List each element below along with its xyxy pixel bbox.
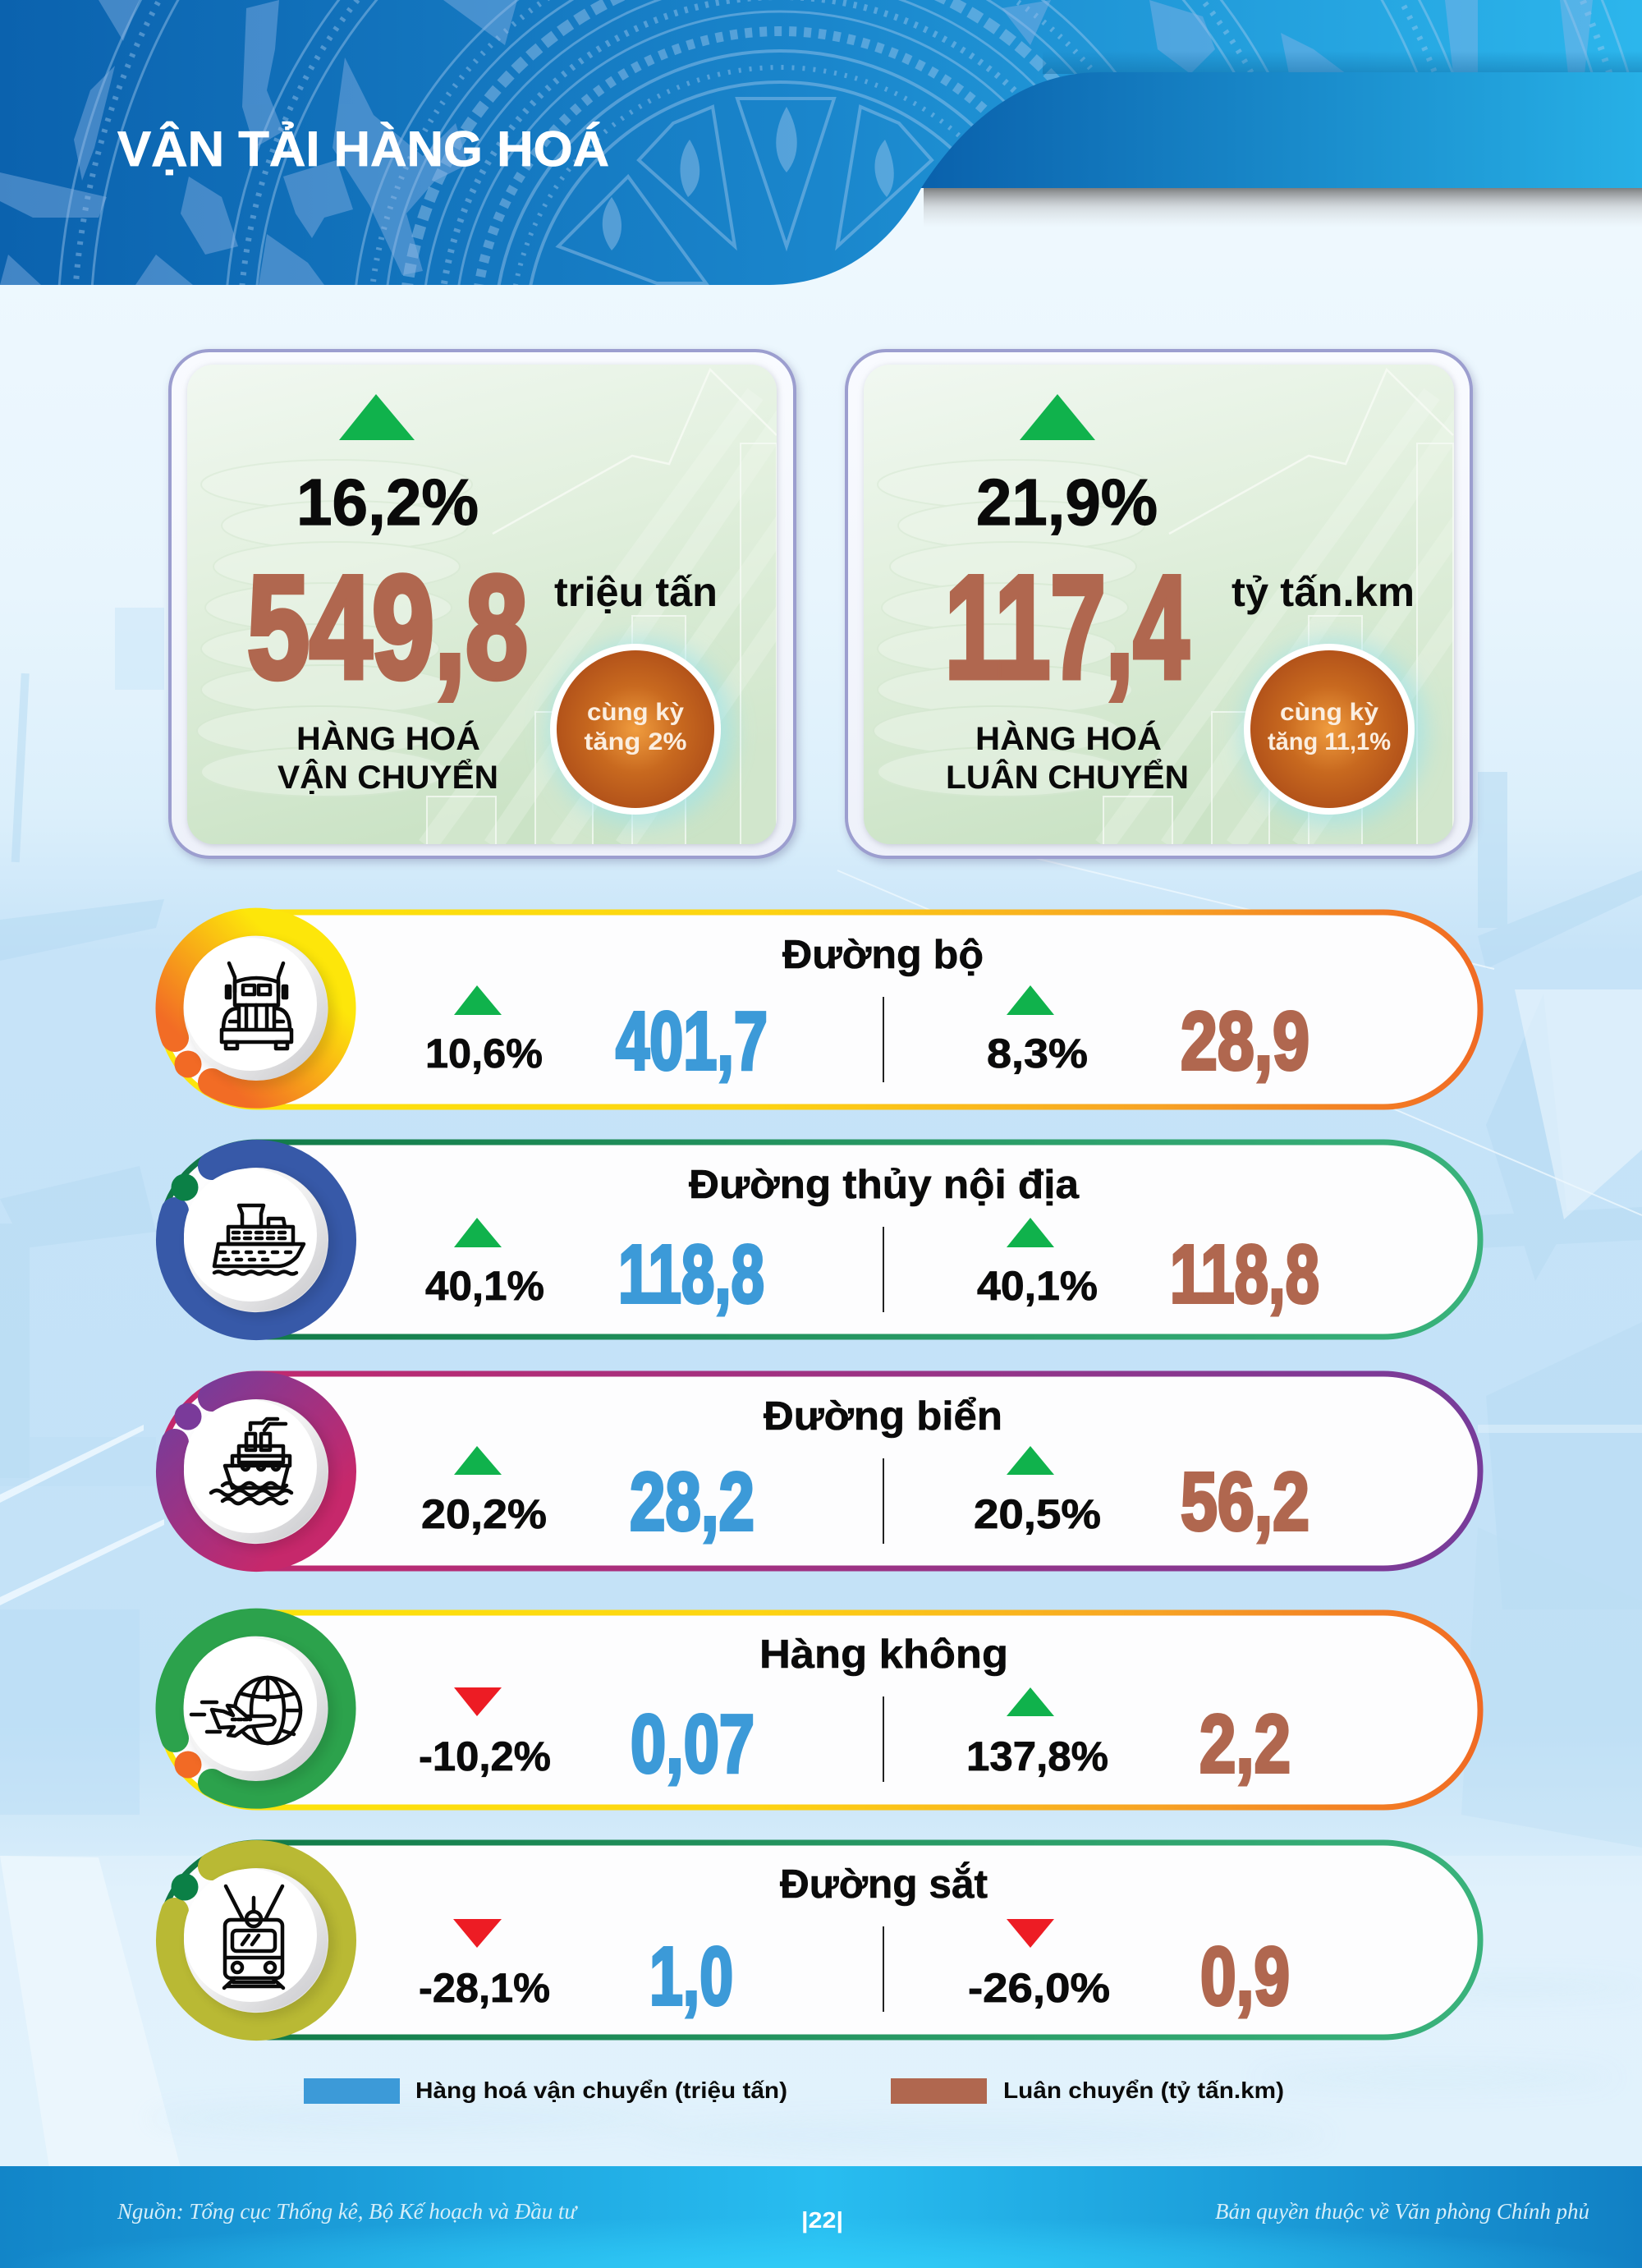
row: đường biển: 20,5% bbox=[974, 1491, 1101, 1537]
row: đường thủy nội địa: Đường thủy nội địa bbox=[689, 1163, 1080, 1207]
row: đường sắt: 1,0 bbox=[649, 1931, 733, 2022]
panel: hàng hoá vận chuyển: 549,8 bbox=[247, 545, 528, 709]
row: đường sắt: 0,9 bbox=[1200, 1931, 1290, 2022]
row: đường sắt: Đường sắt bbox=[780, 1862, 988, 1907]
row: đường thủy nội địa: 40,1% bbox=[425, 1263, 544, 1309]
badge: cùng kỳ tăng 2%: tăng 2% bbox=[585, 728, 686, 755]
panel: hàng hoá vận chuyển: 16,2% bbox=[296, 466, 479, 539]
row: đường thủy nội địa: 40,1% bbox=[977, 1263, 1098, 1309]
header banner with bronze-drum pattern bbox=[0, 0, 1642, 285]
legend bbox=[304, 2077, 1284, 2104]
footer bbox=[0, 2166, 1642, 2268]
badge: cùng kỳ tăng 11,1%: cùng kỳ bbox=[1280, 699, 1378, 726]
row: hàng không: -10,2% bbox=[419, 1733, 551, 1779]
row: đường bộ bbox=[160, 912, 1480, 1107]
footer: |22| bbox=[801, 2207, 843, 2233]
row: đường biển bbox=[160, 1374, 1480, 1568]
row: đường bộ: 401,7 bbox=[616, 995, 768, 1087]
legend: Hàng hoá vận chuyển (triệu tấn) bbox=[415, 2077, 787, 2103]
row: đường biển: 20,2% bbox=[421, 1491, 547, 1537]
row: đường thủy nội địa: 118,8 bbox=[1170, 1228, 1319, 1320]
row: đường sắt: -28,1% bbox=[419, 1965, 550, 2011]
panel: hàng hoá vận chuyển: triệu tấn bbox=[554, 569, 718, 615]
row: đường sắt bbox=[160, 1843, 1480, 2037]
icon: ship in ring bbox=[170, 1385, 342, 1558]
row: đường thủy nội địa bbox=[160, 1142, 1480, 1337]
row: đường biển: Đường biển bbox=[764, 1394, 1002, 1439]
icon: ferry in ring bbox=[170, 1154, 342, 1326]
panel: hàng hoá luân chuyển: tỷ tấn.km bbox=[1232, 569, 1415, 615]
panel: hàng hoá vận chuyển: VẬN CHUYỂN bbox=[277, 757, 498, 796]
panel: hàng hoá luân chuyển: 117,4 bbox=[945, 545, 1189, 709]
row: đường bộ: 10,6% bbox=[425, 1031, 543, 1077]
row: hàng không: 2,2 bbox=[1199, 1698, 1291, 1790]
icon: train in ring bbox=[170, 1854, 342, 2027]
icon: plane and globe in ring bbox=[170, 1623, 342, 1795]
badge: cùng kỳ tăng 11,1% bbox=[1242, 640, 1426, 824]
row: đường biển: 28,2 bbox=[630, 1456, 754, 1548]
row: hàng không: 137,8% bbox=[966, 1733, 1108, 1779]
row: đường bộ: Đường bộ bbox=[782, 933, 984, 977]
icon: truck in ring bbox=[170, 922, 342, 1095]
row: hàng không: 0,07 bbox=[631, 1698, 754, 1790]
footer: Nguồn: Tổng cục Thống kê, Bộ Kế hoạch và Đầu tư bbox=[117, 2199, 578, 2224]
badge: cùng kỳ tăng 2% bbox=[548, 640, 732, 824]
badge: cùng kỳ tăng 2%: cùng kỳ bbox=[587, 699, 684, 726]
row: hàng không: Hàng không bbox=[759, 1632, 1008, 1677]
row: đường bộ: 28,9 bbox=[1181, 995, 1309, 1087]
panel: hàng hoá luân chuyển: HÀNG HOÁ bbox=[975, 720, 1162, 757]
header right band bbox=[921, 72, 1642, 188]
legend: Luân chuyển (tỷ tấn.km) bbox=[1003, 2077, 1284, 2103]
shadow under blue band bbox=[924, 188, 1642, 227]
row: đường sắt: -26,0% bbox=[968, 1965, 1110, 2011]
row: hàng không bbox=[160, 1613, 1480, 1807]
panel: hàng hoá luân chuyển bbox=[846, 351, 1498, 857]
row: đường bộ: 8,3% bbox=[987, 1031, 1088, 1077]
row: đường biển: 56,2 bbox=[1181, 1456, 1309, 1548]
panel: hàng hoá luân chuyển: LUÂN CHUYỂN bbox=[946, 757, 1189, 796]
badge: cùng kỳ tăng 11,1%: tăng 11,1% bbox=[1268, 728, 1391, 755]
panel: hàng hoá vận chuyển bbox=[170, 351, 821, 857]
panel: hàng hoá vận chuyển: HÀNG HOÁ bbox=[296, 720, 480, 757]
title: VẬN TẢI HÀNG HOÁ bbox=[117, 122, 609, 177]
footer: Bản quyền thuộc về Văn phòng Chính phủ bbox=[1215, 2199, 1589, 2224]
panel: hàng hoá luân chuyển: 21,9% bbox=[976, 466, 1158, 539]
row: đường thủy nội địa: 118,8 bbox=[618, 1228, 764, 1320]
